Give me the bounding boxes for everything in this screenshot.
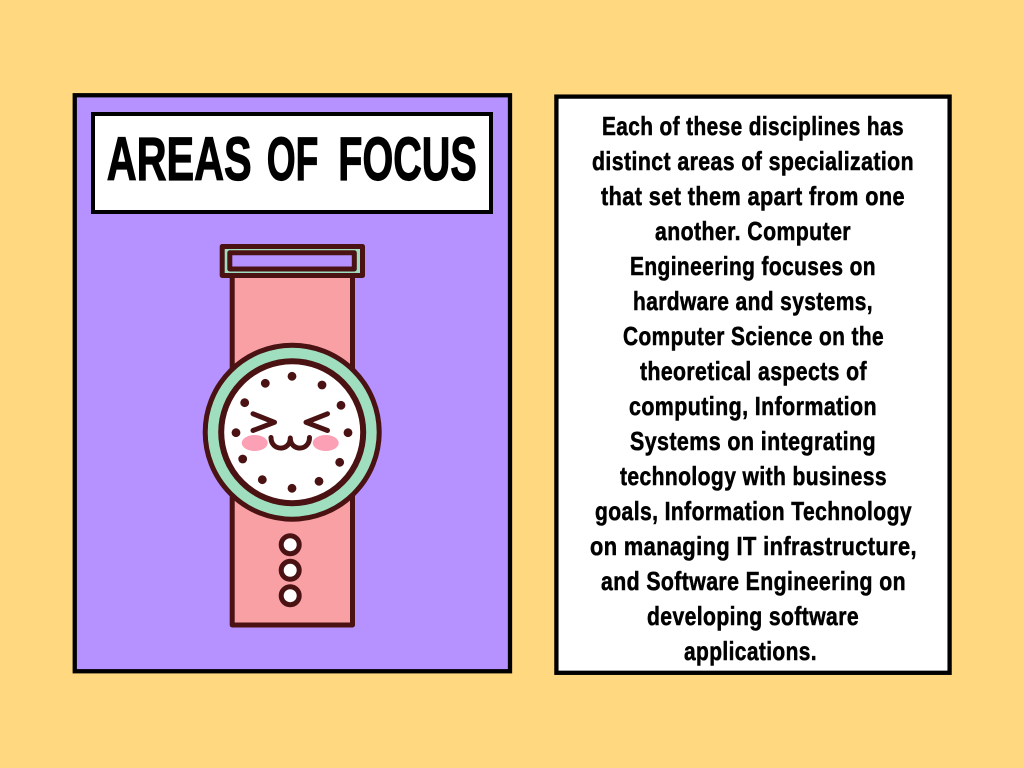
description text: hardware and systems, bbox=[633, 286, 873, 316]
strap holes bbox=[281, 536, 299, 605]
description text: Systems on integrating bbox=[630, 426, 876, 456]
title: FOCUS bbox=[338, 125, 477, 193]
panel: left illustration bbox=[75, 95, 510, 671]
description text: that set them apart from one bbox=[601, 181, 905, 211]
hour dots bbox=[232, 372, 352, 493]
description text: Engineering focuses on bbox=[630, 251, 876, 281]
description text: another. Computer bbox=[655, 216, 851, 246]
description text: on managing IT infrastructure, bbox=[590, 531, 917, 561]
title box bbox=[93, 114, 491, 212]
icon: kawaii wristwatch bbox=[205, 246, 379, 625]
description text: computing, Information bbox=[629, 391, 877, 421]
strap buckle bbox=[222, 246, 362, 276]
description text: Each of these disciplines has bbox=[602, 111, 904, 141]
description text: developing software bbox=[647, 601, 859, 631]
description text: Computer Science on the bbox=[623, 321, 884, 351]
watch strap bbox=[232, 270, 352, 625]
face: eyes and mouth bbox=[253, 414, 328, 448]
title bbox=[107, 125, 477, 193]
description text: technology with business bbox=[620, 461, 887, 491]
description text: goals, Information Technology bbox=[595, 496, 912, 526]
title: OF bbox=[267, 125, 318, 193]
panel: description bbox=[556, 97, 950, 673]
watch face bbox=[205, 345, 379, 519]
title: AREAS bbox=[107, 125, 252, 193]
description text bbox=[590, 111, 917, 666]
description text: and Software Engineering on bbox=[601, 566, 906, 596]
description text: theoretical aspects of bbox=[640, 356, 867, 386]
description text: distinct areas of specialization bbox=[592, 146, 914, 176]
description text: applications. bbox=[684, 636, 817, 666]
cheeks bbox=[242, 435, 339, 451]
